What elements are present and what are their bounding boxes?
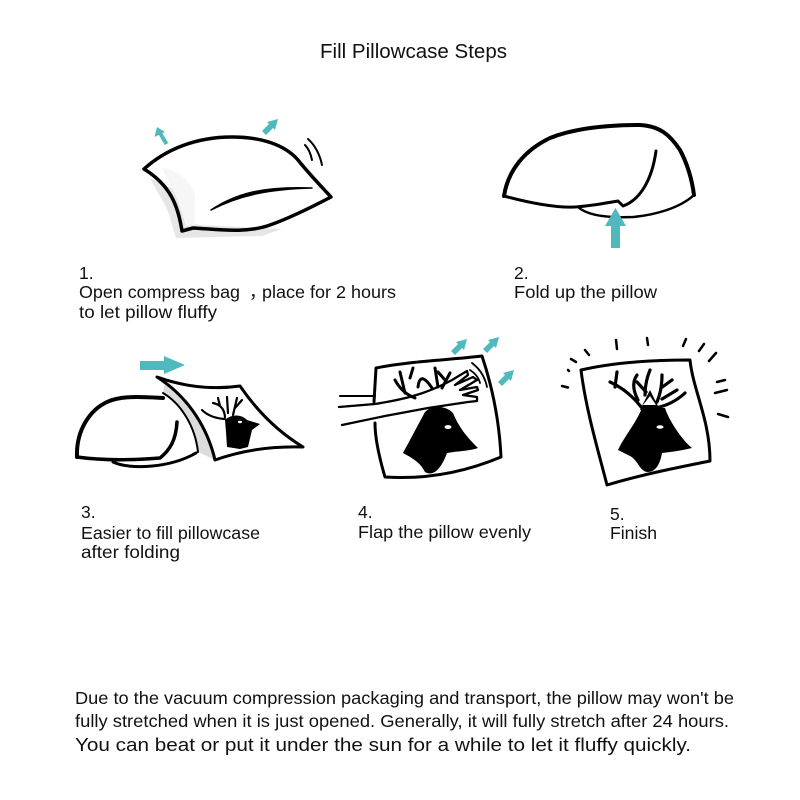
title: Fill Pillowcase Steps [320, 41, 507, 63]
text: step 2: Fold up the pillow [514, 282, 657, 302]
text: step 3 [81, 502, 260, 562]
text: step 1: 1. [79, 263, 94, 283]
step 3 illustration: filling the pillowcase [77, 356, 303, 467]
text: step 2: 2. [514, 263, 529, 283]
step 4 illustration: flapping the pillow [339, 337, 514, 478]
step 2 illustration: folded pillow with arrow [504, 125, 694, 248]
text: step 1 [79, 263, 396, 322]
text: step 3: after folding [81, 542, 180, 562]
note paragraph: You can beat or put it under the sun for a while to let it fluffy quickly. [75, 734, 691, 755]
text: step 2 [514, 263, 657, 302]
text: step 3: 3. [81, 502, 96, 522]
text: step 5: 5. [610, 504, 625, 524]
note paragraph: Due to the vacuum compression packaging and transport, the pillow may won't be [75, 688, 734, 708]
note paragraph [75, 688, 734, 755]
text: step 4 [358, 502, 531, 542]
text: step 5 [610, 504, 657, 543]
text: step 1: ， [249, 282, 266, 302]
text: step 1: to let pillow fluffy [79, 302, 217, 322]
step 5 illustration: finished pillow [562, 338, 728, 485]
text: step 5: Finish [610, 523, 657, 543]
text: step 4: 4. [358, 502, 373, 522]
text: step 3: Easier to fill pillowcase [81, 523, 260, 543]
text: step 4: Flap the pillow evenly [358, 522, 531, 542]
note paragraph: fully stretched when it is just opened. Generally, it will fully stretch after 24 hours. [75, 711, 729, 731]
text: step 1: place for 2 hours [262, 282, 396, 302]
text: step 1: Open compress bag [79, 282, 240, 302]
step 1 illustration: pillow with arrows [144, 119, 331, 238]
